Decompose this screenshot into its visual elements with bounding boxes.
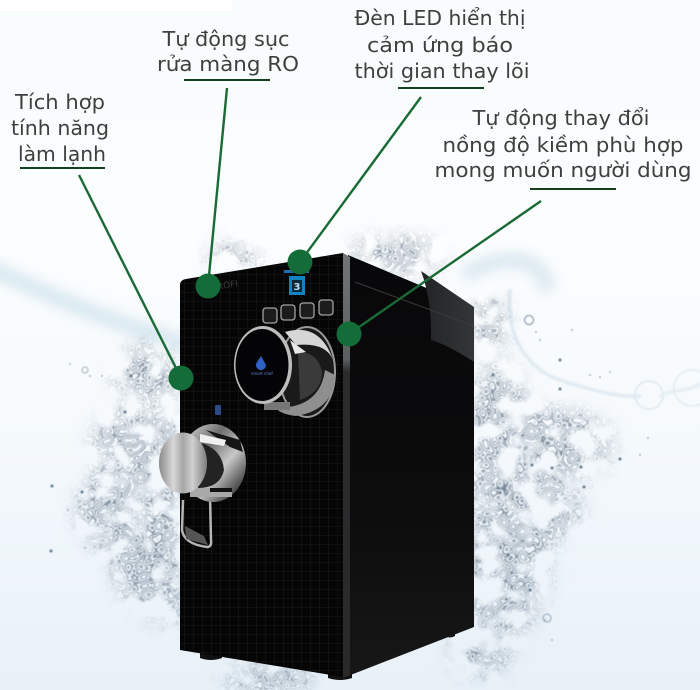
callout: Đèn LED hiển thị cảm ứng báo thời gian thay lõi [288, 6, 530, 274]
callout text: tính năng [11, 116, 109, 140]
callout text [354, 6, 530, 83]
feet [200, 630, 455, 680]
callout text: Đèn LED hiển thị [354, 6, 526, 30]
callout text: nồng độ kiềm phù hợp [442, 133, 684, 157]
callout text: thời gian thay lõi [354, 59, 530, 83]
callout text [11, 90, 109, 166]
display: calendar icon [284, 270, 309, 295]
front panel [180, 253, 343, 677]
lower tap [159, 424, 246, 547]
callout text: rửa màng RO [157, 52, 299, 76]
touch buttons [263, 300, 333, 323]
callout text: cảm ứng báo [367, 33, 513, 57]
callout text: làm lạnh [18, 142, 106, 166]
callout text: Tích hợp [14, 90, 105, 114]
callout: Tích hợp tính năng làm lạnh [11, 90, 194, 390]
callout text: mong muốn người dùng [434, 158, 692, 182]
water splash droplets [78, 238, 610, 690]
upper tap [234, 326, 335, 417]
display: calendar icon: 3 [294, 282, 301, 293]
callout text: Tự động thay đổi [471, 106, 650, 130]
upper tap: smart chef [251, 371, 273, 376]
blue indicator [215, 405, 221, 415]
callout text [434, 106, 692, 182]
callout text: Tự động sục [161, 27, 290, 51]
water wave streaks [0, 260, 700, 409]
side panel [348, 255, 474, 676]
brand text: KAROFI [205, 279, 239, 295]
scattered droplets [51, 316, 648, 640]
callout text [157, 27, 299, 76]
corner edge [343, 253, 350, 678]
product: water purifier [159, 253, 474, 680]
callout: Tự động sục rửa màng RO [157, 27, 299, 298]
callout: Tự động thay đổi nồng độ kiềm phù hợp mong muốn người dùng [336, 106, 692, 346]
